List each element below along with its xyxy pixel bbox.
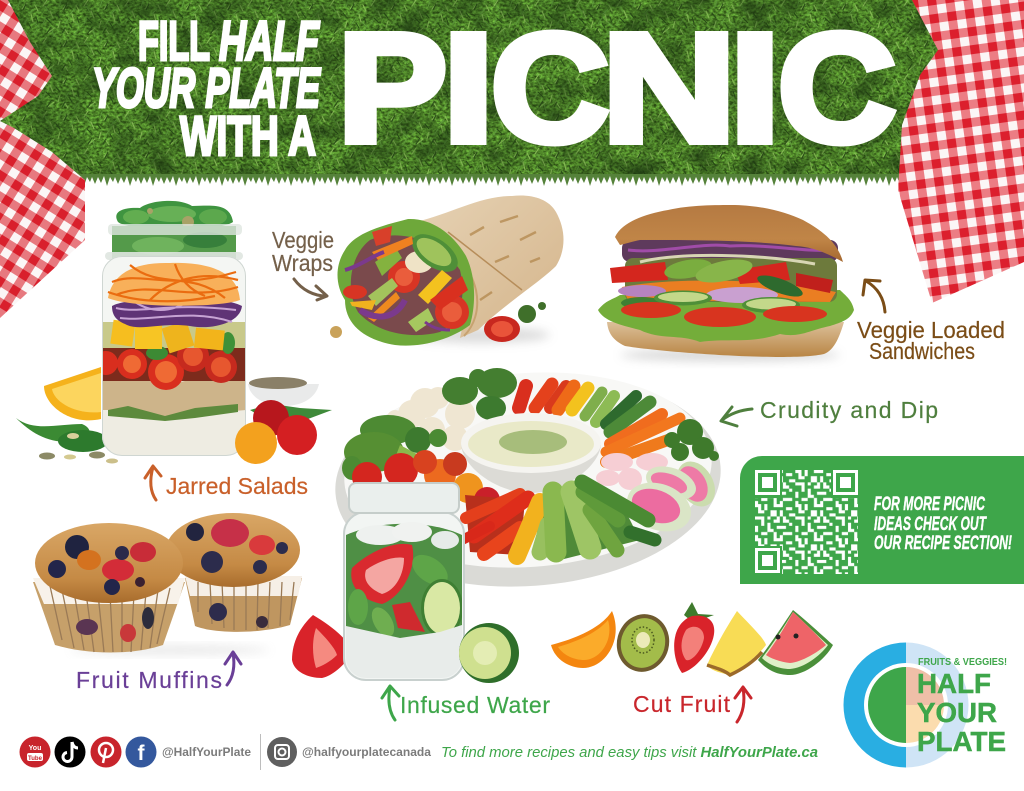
arrow: to sandwich — [863, 280, 885, 312]
cut fruit illustration — [551, 602, 833, 678]
jarred salad illustration — [16, 201, 332, 464]
plate circle — [844, 642, 968, 768]
tortilla — [416, 196, 564, 338]
bottom bun — [607, 322, 844, 357]
title line: with a: WITH A — [180, 104, 316, 167]
title word: picnic: N — [602, 2, 736, 174]
broccoli left — [342, 415, 447, 480]
dip bowl — [461, 413, 601, 493]
watermelon radish slices — [620, 455, 723, 540]
label: fruit muffins — [76, 652, 241, 693]
icon: kiwi — [610, 608, 676, 678]
arrow: up to muffins — [225, 652, 241, 685]
icon: facebook: f — [138, 742, 146, 765]
wrap filling — [338, 219, 474, 346]
title word: picnic: I — [730, 2, 780, 174]
icon: youtube: Tube — [28, 756, 43, 762]
label: cut fruit: Cut Fruit — [633, 691, 731, 717]
title word: picnic: I — [443, 2, 494, 174]
label: cut fruit — [633, 687, 751, 722]
crudite platter illustration — [328, 360, 728, 599]
arrow: up to jar — [145, 466, 161, 500]
label: infused water — [382, 686, 550, 720]
platter — [328, 360, 728, 599]
icon: orange — [551, 611, 616, 668]
icon: youtube — [20, 736, 50, 768]
QR call to action — [874, 494, 1012, 554]
sandwich filling — [610, 240, 838, 327]
title word: picnic: P — [338, 2, 447, 174]
muffin: left — [33, 523, 185, 653]
jar glass — [344, 483, 464, 680]
title line: fill half: HALF — [219, 9, 320, 72]
label: crudity and dip: Crudity and Dip — [760, 397, 938, 423]
gingham napkin: top right — [898, 0, 1024, 303]
label: jarred salads: Jarred Salads — [166, 473, 308, 499]
QR panel — [740, 456, 1024, 584]
title word: picnic: C — [778, 2, 896, 174]
label: infused water: Infused Water — [400, 692, 550, 718]
logo text — [917, 657, 1007, 757]
title — [92, 2, 896, 174]
icon: tiktok — [54, 736, 86, 768]
footer call to action: To find more recipes and easy tips visit HalfYourPlate.ca — [441, 745, 818, 761]
label: veggie loaded sandwiches — [857, 280, 1005, 364]
logo text: FRUITS & VEGGIES! — [918, 657, 1007, 668]
icon: watermelon — [758, 610, 833, 675]
jar body with layers — [94, 256, 246, 456]
infused water illustration — [292, 483, 519, 683]
icon: pineapple — [707, 611, 766, 675]
icon: cucumber slice — [459, 623, 519, 683]
title line: fill half: FILL — [138, 9, 210, 72]
title line: your plate: YOUR PLATE — [92, 56, 321, 119]
jar lid and greens — [105, 201, 243, 262]
icon: instagram — [267, 737, 297, 767]
label: jarred salads — [145, 466, 308, 500]
lettuce — [598, 290, 854, 342]
cauliflower — [387, 387, 475, 451]
broccoli top — [442, 368, 517, 420]
veggie wrap illustration — [330, 196, 564, 346]
icon: youtube: You — [29, 745, 41, 752]
icon: facebook — [126, 736, 156, 768]
arrow: to wrap — [294, 279, 327, 300]
label: veggie wraps: Wraps — [272, 250, 333, 276]
parsley — [664, 419, 719, 461]
icon: cherry tomatoes — [235, 400, 317, 464]
arrow: to platter — [721, 407, 752, 426]
title line: fill half — [138, 9, 320, 72]
logo text: YOUR — [917, 697, 997, 728]
carrots and peppers fan — [519, 384, 680, 462]
jar contents — [346, 522, 463, 680]
icon: spinach and seeds — [16, 418, 118, 464]
label: veggie wraps: Veggie — [272, 227, 334, 253]
veggie loaded sandwich illustration — [598, 205, 854, 361]
logo text: PLATE — [917, 726, 1006, 757]
arrow: up to jar — [382, 686, 399, 720]
icon: tomato slice and herbs — [330, 302, 546, 342]
icon: seed bowl — [248, 377, 332, 422]
label: veggie wraps — [272, 227, 334, 300]
icon: lemon wedge — [44, 367, 101, 420]
fruit muffins illustration — [33, 513, 302, 654]
label: veggie loaded sandwiches: Veggie Loaded — [857, 317, 1005, 343]
gingham napkin: top left — [0, 0, 85, 318]
QR code — [752, 468, 861, 576]
radishes — [596, 453, 668, 490]
pepper strips and cucumber sticks — [462, 482, 655, 560]
logo: half your plate — [844, 642, 1007, 768]
top bun — [615, 205, 843, 262]
logo text: HALF — [917, 668, 991, 699]
icon: strawberry — [292, 615, 352, 678]
tomatoes — [352, 450, 500, 513]
icon: pinterest — [90, 736, 122, 768]
footer social bar — [20, 734, 818, 770]
icon: strawberry — [674, 602, 714, 673]
title word: picnic: C — [491, 2, 609, 174]
handle: half your plate: @HalfYourPlate — [162, 745, 251, 759]
label: veggie loaded sandwiches: Sandwiches — [869, 338, 975, 364]
label: fruit muffins: Fruit Muffins — [76, 667, 222, 693]
grass banner — [0, 0, 1024, 187]
muffin: right — [166, 513, 302, 632]
handle: instagram: @halfyourplatecanada — [302, 745, 431, 759]
arrow: up to fruit — [735, 687, 751, 722]
